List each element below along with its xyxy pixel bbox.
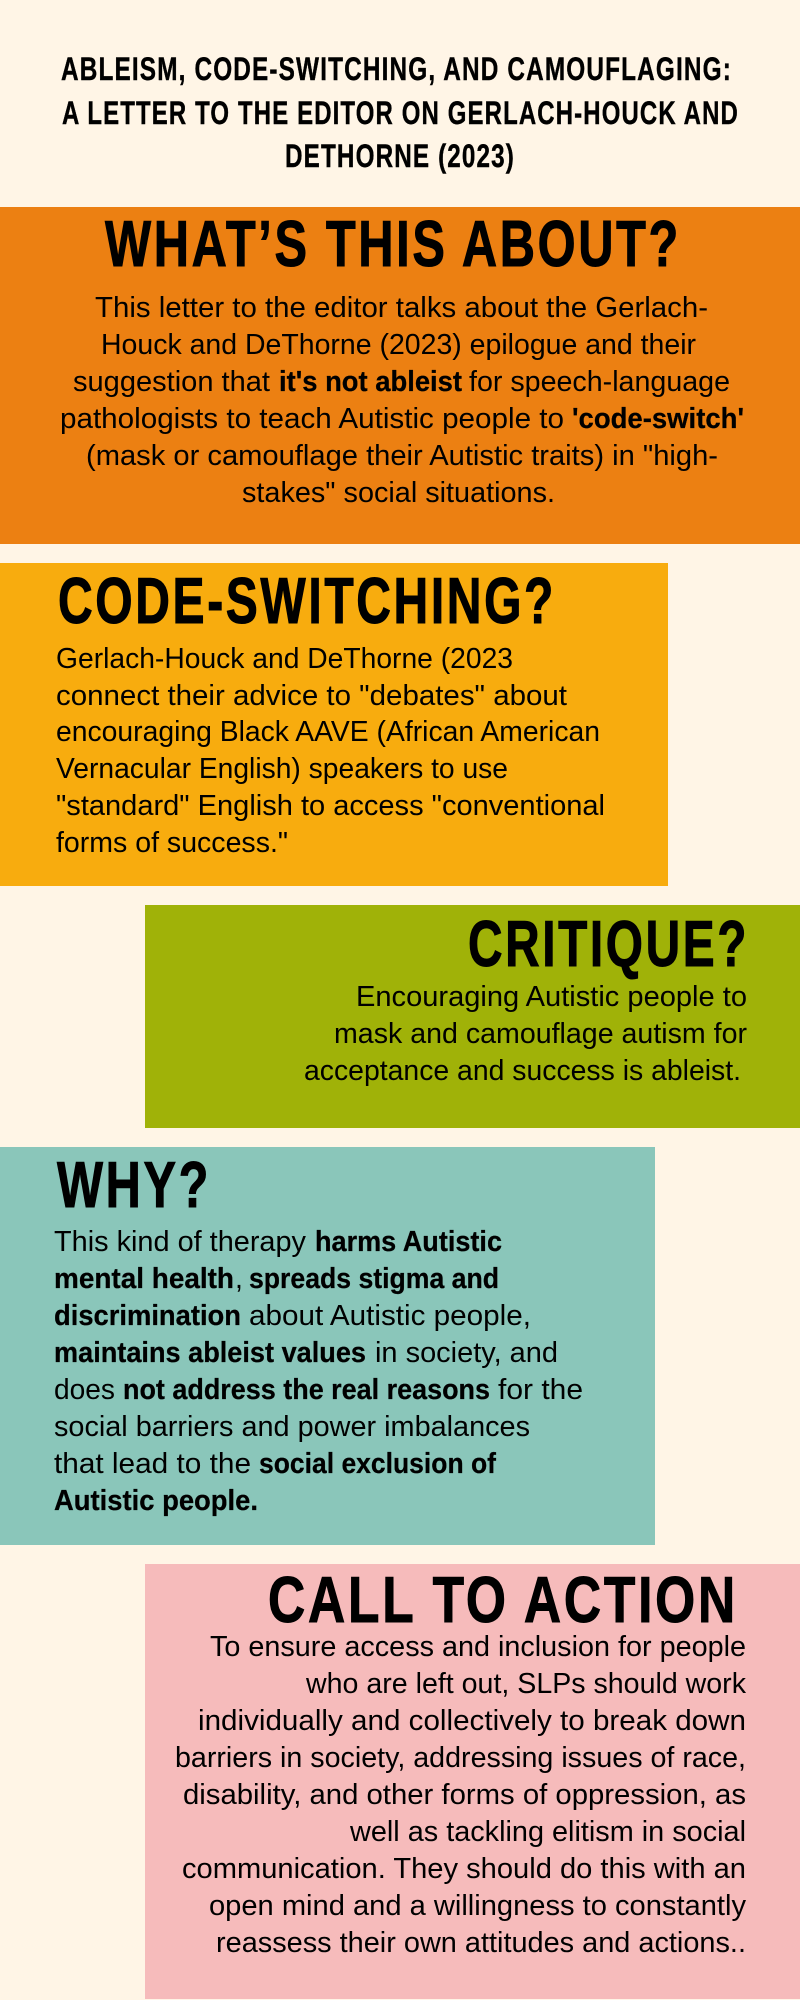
body text: why: in society, and <box>375 1337 558 1369</box>
body text: code-switching: Gerlach-Houck and DeThorne (2023 <box>56 643 513 675</box>
panel: critique <box>145 905 800 1128</box>
body text: critique: acceptance and success is ableist. <box>304 1055 741 1087</box>
panel background: orange <box>0 207 800 544</box>
body text: code-switching: connect their advice to "debates" about <box>56 680 567 712</box>
body text: critique: mask and camouflage autism for <box>334 1018 748 1050</box>
body text: why: discrimination <box>54 1300 241 1332</box>
body text: what's this about: for speech-language <box>469 366 730 398</box>
body text: why: Autistic people. <box>54 1485 258 1517</box>
body text: call to action <box>175 1631 747 1959</box>
panel background: teal <box>0 1147 655 1545</box>
panel background: green <box>145 905 800 1128</box>
body text: code-switching: forms of success." <box>56 827 288 859</box>
panel: code-switching <box>0 563 668 886</box>
body text: why: social exclusion of <box>259 1448 496 1480</box>
body text: call to action: who are left out, SLPs should work <box>305 1668 747 1700</box>
body text: what's this about: suggestion that <box>73 366 270 398</box>
body text: call to action: disability, and other forms of oppression, as <box>183 1779 746 1811</box>
body text: what's this about: 'code-switch' <box>572 403 744 435</box>
body text: why: that lead to the <box>54 1448 251 1480</box>
body text: what's this about: it's not ableist <box>279 366 462 398</box>
body text: why: , <box>235 1263 243 1295</box>
body text: call to action: To ensure access and inclusion for people <box>210 1631 746 1663</box>
body text: call to action: open mind and a willingness to constantly <box>209 1890 747 1922</box>
body text: why: for the <box>498 1374 583 1406</box>
heading: code-switching: CODE-SWITCHING? <box>58 564 556 637</box>
body text: call to action: individually and collectively to break down <box>198 1705 746 1737</box>
panel: call to action <box>145 1563 800 1999</box>
body text: critique <box>304 981 748 1087</box>
body text: critique: Encouraging Autistic people to <box>356 981 747 1013</box>
body text: why: spreads stigma and <box>249 1263 499 1295</box>
heading: why: WHY? <box>57 1148 211 1221</box>
body text: call to action: reassess their own attitudes and actions.. <box>216 1927 746 1959</box>
body text: what's this about: This letter to the editor talks about the Gerlach- <box>95 292 708 324</box>
panel background: pink <box>145 1564 800 1999</box>
title <box>61 51 739 174</box>
body text: code-switching: encouraging Black AAVE (African American <box>56 716 600 748</box>
body text: why: harms Autistic <box>315 1226 502 1258</box>
body text: why <box>54 1226 583 1517</box>
body text: what's this about: pathologists to teach Autistic people to <box>60 403 564 435</box>
body text: what's this about <box>60 292 744 509</box>
body text: call to action: well as tackling elitism in social <box>349 1816 746 1848</box>
body text: why: mental health <box>54 1263 234 1295</box>
body text: why: not address the real reasons <box>123 1374 490 1406</box>
body text: why: about Autistic people, <box>249 1300 531 1332</box>
title: DETHORNE (2023) <box>285 138 515 174</box>
panel background: yellow <box>0 563 668 886</box>
body text: call to action: communication. They should do this with an <box>182 1853 746 1885</box>
body text: what's this about: stakes" social situations. <box>242 477 555 509</box>
body text: why: does <box>54 1374 115 1406</box>
panel: why <box>0 1147 655 1545</box>
body text: why: This kind of therapy <box>54 1226 307 1258</box>
body text: code-switching: "standard" English to access "conventional <box>56 790 605 822</box>
body text: why: social barriers and power imbalances <box>54 1411 530 1443</box>
body text: call to action: barriers in society, addressing issues of race, <box>175 1742 746 1774</box>
body text: code-switching <box>56 643 605 859</box>
body text: what's this about: (mask or camouflage their Autistic traits) in "high- <box>86 440 718 472</box>
body text: why: maintains ableist values <box>54 1337 366 1369</box>
body text: code-switching: Vernacular English) speakers to use <box>56 753 508 785</box>
panel: what's this about <box>0 207 800 544</box>
body text: what's this about: Houck and DeThorne (2023) epilogue and their <box>101 329 697 361</box>
